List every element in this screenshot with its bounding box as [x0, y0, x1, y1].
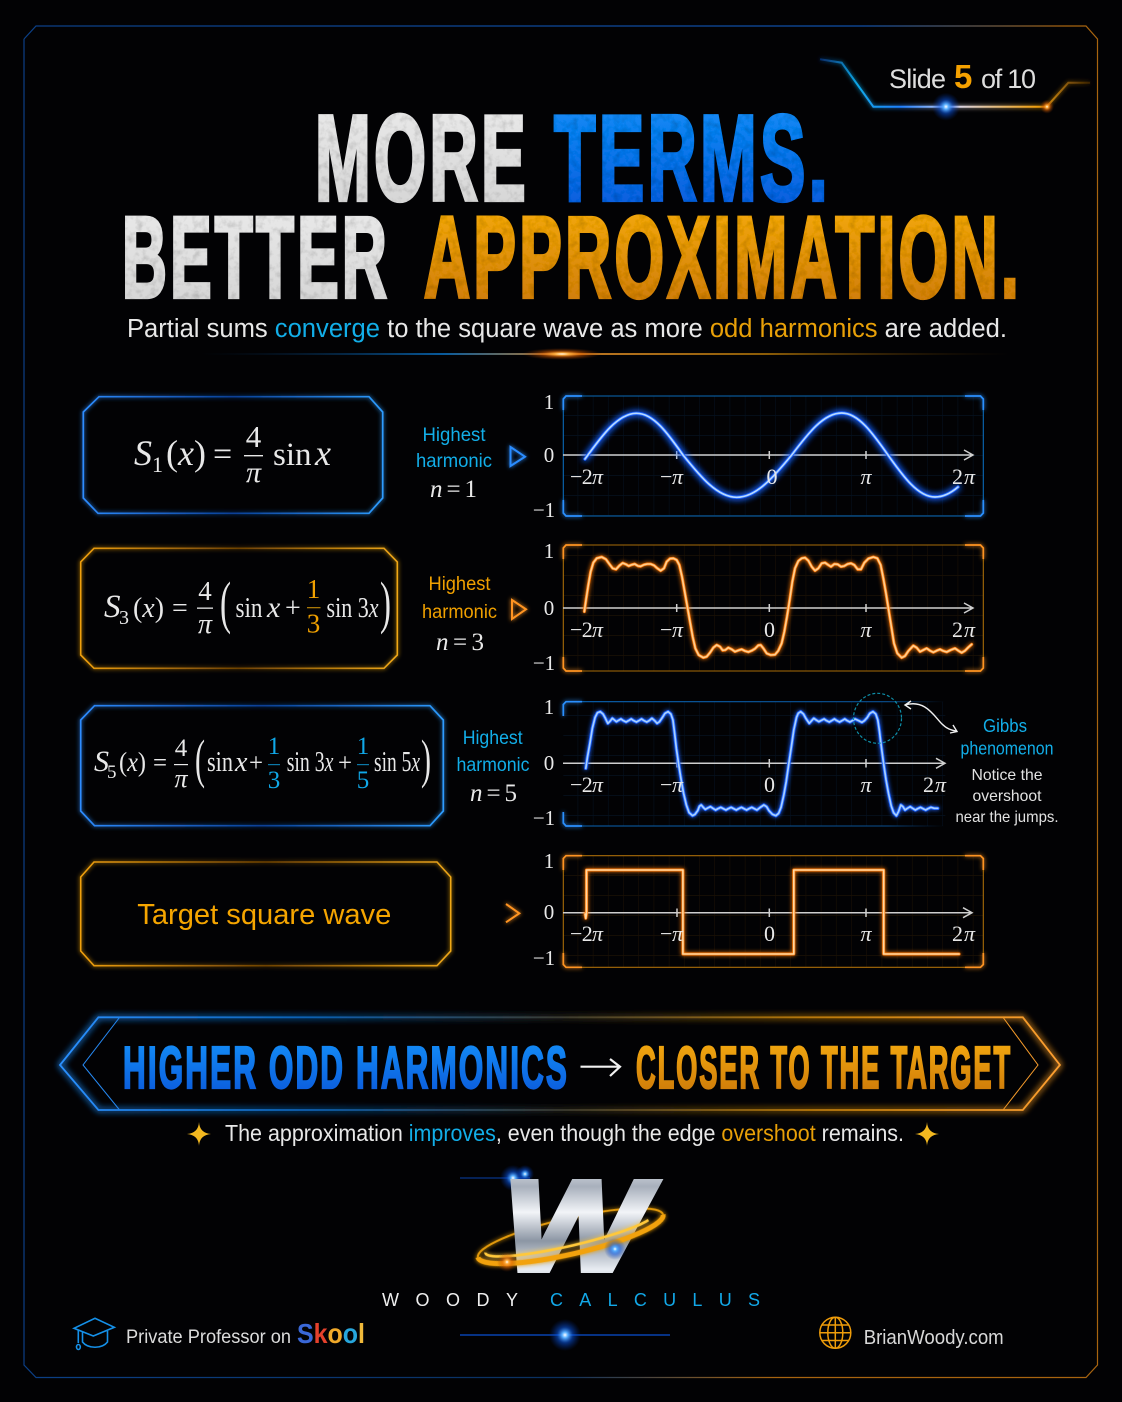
formula S3: S [104, 589, 120, 625]
formula S5: x [234, 747, 248, 778]
y labels [533, 849, 555, 970]
y labels: 1 [544, 390, 554, 414]
x labels: π [860, 464, 872, 489]
formula S5: = [153, 748, 167, 777]
box outline [81, 706, 443, 826]
skool wordmark: Skool [297, 1318, 365, 1349]
formula S3: π [198, 609, 213, 640]
axis [563, 450, 973, 460]
slide number text: of 10 [981, 64, 1036, 94]
formula S5: 5 [357, 767, 369, 794]
box outline [83, 397, 383, 513]
x labels: 0 [764, 772, 775, 797]
formula S5: ( [195, 729, 205, 789]
formula S5: π [174, 764, 188, 793]
box outline [81, 548, 397, 668]
formula S5: 4 [175, 735, 188, 762]
square wave [585, 870, 959, 954]
row 3 harmonic label: n=5 [470, 780, 517, 807]
banner outer frame [60, 1017, 1060, 1110]
x labels: −2π [570, 464, 604, 489]
logo letter: W [503, 1155, 658, 1298]
subtitle: Partial sums converge to the square wave as more odd harmonics are added. [127, 315, 1007, 343]
target label: Target square wave [137, 899, 391, 931]
gibbs highlight circle [854, 693, 902, 743]
formula S5: 5 [107, 762, 116, 783]
brand name [382, 1290, 760, 1310]
formula S3: ( [220, 570, 231, 635]
icon: graduation cap [74, 1318, 114, 1350]
gibbs callout: Notice the [972, 767, 1043, 784]
gibbs callout: overshoot [972, 788, 1042, 805]
x labels: 2π [952, 464, 976, 489]
chart frame [563, 396, 983, 516]
chart S5 [533, 695, 947, 830]
icon: globe [820, 1317, 851, 1348]
formula S3: x [266, 591, 281, 624]
brand name: CALCULUS [550, 1290, 760, 1310]
title word: MORE: MORE [315, 90, 529, 226]
row 4 arrow [506, 904, 519, 922]
y labels [533, 539, 555, 675]
y labels: −1 [533, 806, 555, 830]
formula S5: + [338, 748, 352, 777]
icon: left sparkle [187, 1122, 211, 1146]
chart S3 [533, 539, 983, 675]
tag flares [932, 93, 1054, 121]
x labels: π [860, 921, 872, 946]
x labels: −π [660, 617, 684, 642]
x labels: −π [660, 772, 684, 797]
x labels [570, 617, 976, 642]
banner arrow [580, 1059, 620, 1076]
bottom flare [460, 1319, 670, 1351]
subtitle divider [200, 348, 1010, 360]
row 2 harmonic label: harmonic [422, 601, 497, 623]
x labels: −2π [570, 921, 604, 946]
y labels: 1 [544, 539, 554, 563]
tag line [820, 59, 1090, 107]
brand name: WOODY [382, 1290, 518, 1310]
formula S3: + [285, 593, 301, 624]
gibbs callout: phenomenon [960, 738, 1054, 758]
formula S1: S [134, 433, 152, 473]
x labels [570, 464, 976, 489]
formula S1: x [314, 433, 331, 473]
logo top flare [460, 1165, 534, 1191]
formula S5: sin 3x [287, 747, 334, 778]
y labels [533, 695, 555, 830]
formula S5: sin [207, 747, 233, 778]
sine curve [585, 413, 958, 497]
row 2 harmonic label: Highest [428, 573, 491, 595]
S5 curve [586, 712, 938, 816]
chart S1 [533, 390, 983, 522]
row 3 harmonic label [456, 727, 530, 807]
row 1 harmonic label: Highest [422, 424, 486, 446]
formula S3: (x) [133, 592, 164, 624]
footer website text: BrianWoody.com [864, 1327, 1004, 1349]
row 2 harmonic label [422, 573, 497, 656]
y labels [533, 390, 555, 522]
takeaway sentence: The approximation improves, even though the edge overshoot remains. [225, 1120, 904, 1146]
formula S1: = [213, 436, 232, 473]
x labels: 2π [952, 617, 976, 642]
formula S3: = [172, 593, 188, 624]
x labels [570, 772, 947, 797]
x labels: −2π [570, 772, 604, 797]
formula S5: 1 [357, 733, 369, 760]
formula S1: (x) [166, 433, 206, 473]
formula S1: 4 [246, 419, 262, 454]
formula S3 [104, 570, 391, 640]
formula S5: 1 [268, 733, 280, 760]
formula S3: sin [236, 592, 263, 624]
y labels: 0 [544, 900, 554, 924]
formula S3: 3 [119, 607, 129, 629]
logo ring front [477, 1212, 667, 1275]
formula S3: 1 [307, 574, 320, 604]
x labels [570, 921, 976, 946]
row 3 harmonic label: harmonic [456, 754, 530, 776]
chart target square wave [533, 849, 983, 970]
box outline [81, 862, 451, 966]
gibbs callout: Gibbs [983, 716, 1027, 736]
formula S5 [94, 729, 431, 794]
row 1 formula box [83, 397, 383, 513]
row 4 target box [81, 862, 451, 966]
formula S1: 1 [152, 452, 163, 477]
y labels: 0 [544, 751, 554, 775]
S3 curve [584, 557, 972, 658]
x labels: −2π [570, 617, 604, 642]
icon: right sparkle [915, 1122, 939, 1146]
x labels: 0 [764, 617, 775, 642]
x labels: −π [660, 464, 684, 489]
chart frame [563, 702, 945, 826]
formula S3: sin 3x [326, 592, 379, 624]
formula S1: sin [273, 437, 312, 473]
axis [563, 758, 945, 768]
row 2 harmonic label: n=3 [436, 629, 484, 656]
title [122, 90, 1022, 322]
formula S5: S [94, 745, 109, 778]
y labels: 1 [544, 849, 554, 873]
gibbs callout: near the jumps. [956, 809, 1058, 826]
x labels: 0 [764, 921, 775, 946]
row 1 harmonic label [416, 424, 492, 503]
logo [460, 1155, 667, 1298]
x labels: π [860, 617, 872, 642]
y labels: −1 [533, 651, 555, 675]
footer left text: Private Professor on [126, 1326, 291, 1348]
x labels: −π [660, 921, 684, 946]
chart frame [563, 856, 983, 967]
x labels: π [860, 772, 872, 797]
x labels: 0 [766, 464, 778, 489]
x labels: 2π [952, 921, 976, 946]
y labels: −1 [533, 946, 555, 970]
formula S3: 4 [198, 576, 212, 606]
slide tag [820, 58, 1090, 121]
y labels: −1 [533, 498, 555, 522]
conclusion banner [60, 1017, 1060, 1110]
row 1 harmonic label: harmonic [416, 450, 492, 472]
slide number text: Slide [889, 64, 946, 94]
logo flares [497, 1238, 626, 1272]
row 1 arrow [510, 447, 525, 466]
formula S1: π [246, 456, 262, 489]
formula S5: sin 5x [374, 747, 420, 778]
formula S3: ) [380, 570, 391, 635]
row 2 arrow [512, 600, 526, 619]
row 1 harmonic label: n=1 [430, 476, 477, 503]
gibbs callout [956, 716, 1058, 826]
chart frame [563, 545, 983, 671]
formula S1 [134, 419, 331, 489]
title word: TERMS.: TERMS. [554, 90, 831, 226]
row 2 formula box [81, 548, 397, 668]
formula S5: ) [421, 729, 431, 789]
axis [563, 908, 972, 918]
logo ring back [474, 1197, 663, 1257]
row 3 harmonic label: Highest [463, 727, 523, 749]
banner inner lines [83, 1017, 1038, 1110]
slide number text: 5 [954, 58, 972, 95]
banner left text: HIGHER ODD HARMONICS [123, 1035, 569, 1101]
axis [563, 603, 973, 613]
row 3 formula box [81, 706, 443, 826]
y labels: 0 [544, 596, 554, 620]
title word: BETTER: BETTER [122, 194, 390, 322]
x labels: 2π [923, 772, 947, 797]
formula S3: 3 [307, 608, 320, 638]
formula S5: + [249, 748, 263, 777]
y labels: 1 [544, 695, 554, 719]
formula S5: 3 [268, 767, 280, 794]
y labels: 0 [544, 443, 554, 467]
formula S5: (x) [119, 747, 146, 777]
gibbs arrow [905, 701, 957, 733]
